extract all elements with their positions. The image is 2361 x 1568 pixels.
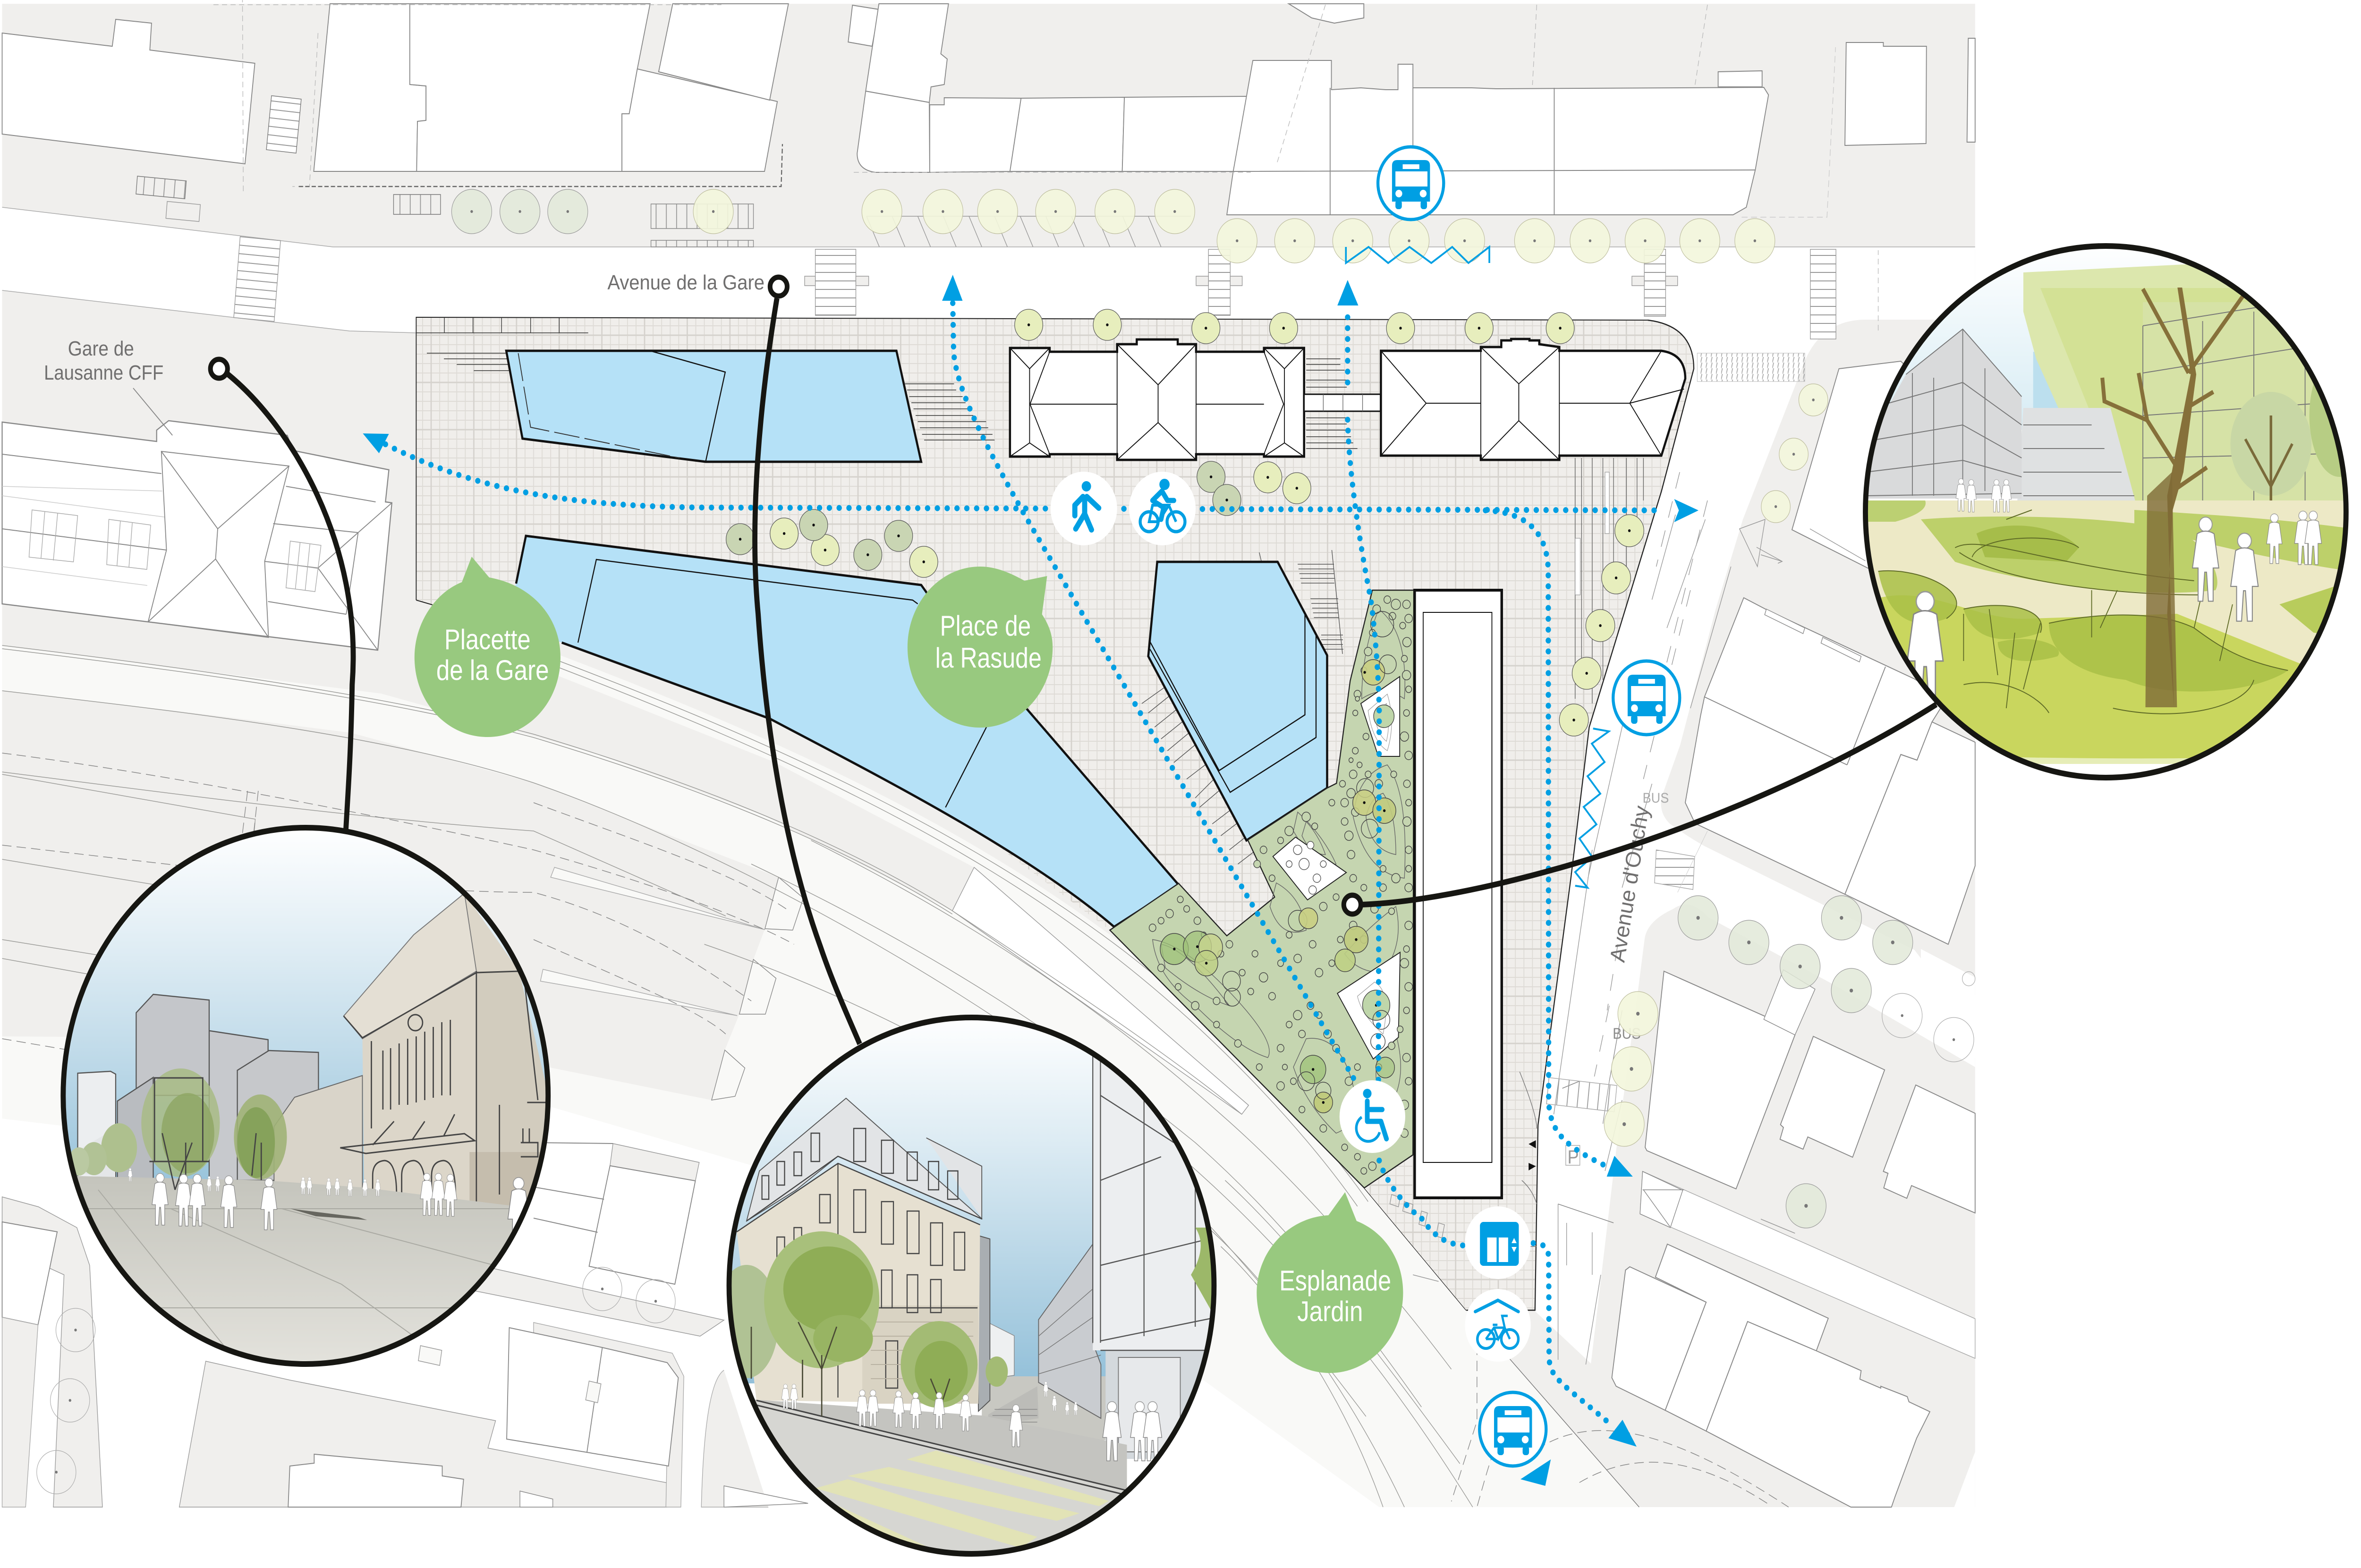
gray buildings: [2016, 408, 2139, 514]
ground: [77, 1176, 512, 1361]
vignette: station square sketch: [51, 826, 555, 1369]
label: Avenue de la Gare: Avenue de la Gare: [607, 271, 764, 294]
people: [781, 1382, 1162, 1461]
stone building: [977, 1235, 990, 1411]
callout: Esplanade Jardin: Jardin: [1297, 1296, 1363, 1328]
callout: Placette de la Gare: de la Gare: [436, 654, 549, 687]
icon: bus stop north: [1378, 147, 1444, 220]
ground: [1861, 500, 2352, 784]
leader line: gare: [211, 359, 353, 832]
main tree: [2102, 288, 2245, 707]
trees: [69, 1068, 287, 1190]
back buildings: [990, 1323, 1014, 1379]
lower-left blocks: [2, 1106, 1975, 1507]
label: Gare de Lausanne CFF: Gare de: [68, 337, 134, 360]
trees background: [2230, 354, 2361, 515]
railway corridor: [2, 605, 1789, 1507]
station facade: [363, 898, 545, 1201]
callout: Place de la Rasude: la Rasude: [935, 642, 1042, 674]
leader line: esplanade: [1344, 704, 1936, 914]
sidewalk details: [136, 0, 1878, 331]
plaza trees: [726, 309, 1644, 736]
icon: bike parking: [1465, 1289, 1531, 1362]
route arrows: [363, 275, 1699, 1486]
label: Avenue d'Ouchy: Avenue d'Ouchy: [1605, 804, 1654, 964]
people: [1907, 479, 2321, 706]
label: bus and parking road marks: [1566, 790, 1669, 1168]
callout: Esplanade Jardin: Esplanade: [1279, 1265, 1391, 1297]
building zone: north-west block: [506, 351, 921, 462]
low building: [274, 1076, 362, 1188]
top buildings: [2, 4, 1975, 215]
label: Gare de Lausanne CFF: Lausanne CFF: [44, 361, 163, 384]
street trees yellow: [693, 189, 1828, 1146]
Gare building: [2, 388, 392, 650]
crosswalks: [234, 237, 1836, 381]
lawn shrubs: [1878, 571, 2288, 692]
planting patches: [1273, 677, 1400, 1059]
callout: Placette de la Gare: [415, 557, 561, 737]
foliage wash: [2023, 262, 2352, 519]
bus stop zigzags: [1346, 247, 1609, 888]
label: bus and parking road marks: BUS: [1643, 790, 1669, 806]
connector: [1304, 394, 1381, 411]
panel: Esplanade garden: [1110, 590, 1414, 1188]
outline trees: [451, 189, 1913, 1228]
right-hand blocks: [1545, 361, 1975, 1507]
icon: bus stop east: [1613, 661, 1680, 735]
street labels: [44, 271, 1654, 964]
stair and road: [988, 1386, 1038, 1426]
garden trees: [1160, 611, 1396, 1113]
label: Gare de Lausanne CFF: [44, 337, 163, 384]
icon: bus stop south: [1479, 1392, 1546, 1466]
people: [128, 1168, 529, 1246]
label: bus and parking road marks: P: [1567, 1146, 1579, 1168]
shrub clusters: [1149, 596, 1412, 1174]
panel: paved plaza: [416, 317, 1694, 1310]
sky patch: [2033, 352, 2079, 411]
callout: Place de la Rasude: Place de: [940, 610, 1031, 642]
leader line: avenue: [755, 277, 860, 1044]
label: bus and parking road marks: BUS: [1613, 1026, 1641, 1042]
icon: plaza entrance triangles: [1529, 1140, 1536, 1170]
icon: wheelchair: [1340, 1080, 1405, 1153]
streets: [2, 207, 1975, 1364]
east heritage building: [1381, 339, 1685, 460]
building zone: central block: [1148, 562, 1327, 840]
west heritage building: [1010, 339, 1304, 460]
glass tower: [1093, 1056, 1230, 1350]
icon: lift: [1465, 1206, 1531, 1279]
panel: heritage buildings: [1010, 339, 1685, 1198]
callout: Place de la Rasude: [908, 567, 1053, 728]
pedestrian routes: [385, 303, 1661, 1425]
vignette: avenue de la Gare street sketch: [714, 1015, 1230, 1568]
callout: Esplanade Jardin: [1257, 1192, 1403, 1373]
callout: Placette de la Gare: Placette: [444, 624, 531, 656]
panel: blue building zones: [504, 351, 1327, 927]
south long building: [1415, 590, 1502, 1198]
towers: [78, 994, 318, 1195]
icon: pedestrian: [1051, 472, 1117, 545]
building zone: south block: [504, 536, 1179, 927]
icon: cyclist: [1129, 472, 1196, 545]
vignette: garden sketch: [1857, 241, 2361, 788]
trees: [714, 1231, 1008, 1416]
